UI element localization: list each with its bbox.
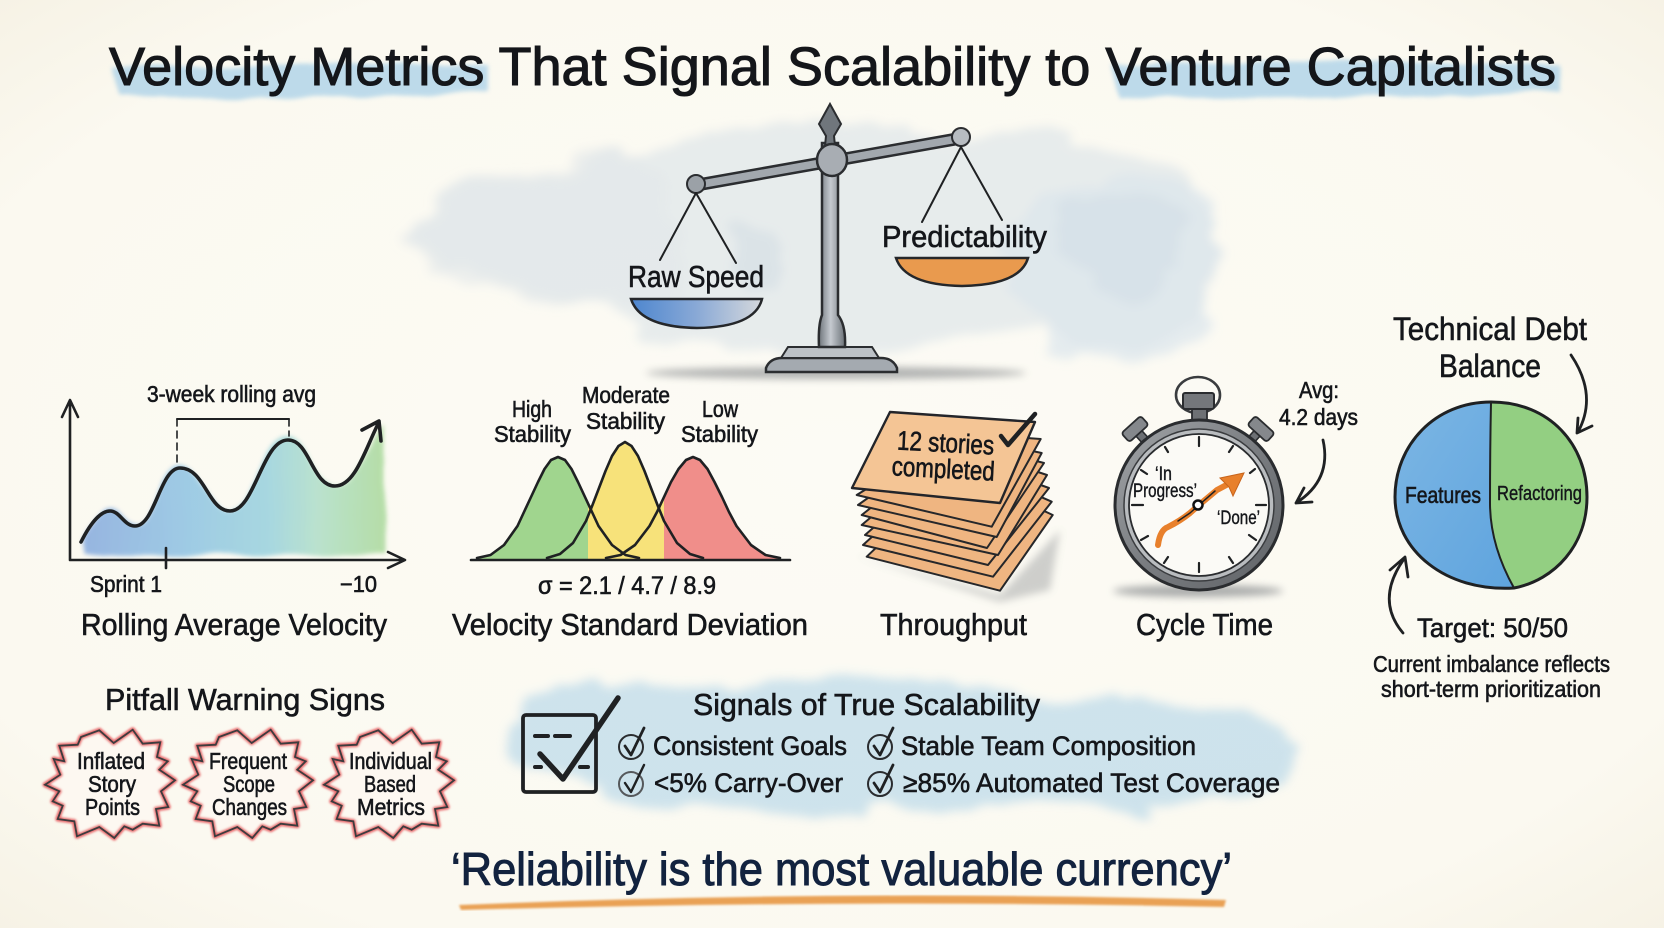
warning badge: inflated story points: Points (85, 794, 140, 820)
label: moderate stability: Moderate (582, 382, 670, 408)
scale finial (819, 104, 841, 146)
green bell fill (477, 457, 588, 560)
warning badge: individual based metrics: Individual (349, 748, 432, 774)
target label: Target: 50/50 (1417, 613, 1568, 643)
panel: signals of true scalability (504, 680, 1295, 815)
label: features: Features (1405, 482, 1481, 508)
red bell fill (664, 457, 780, 560)
imbalance note: Current imbalance reflects (1373, 651, 1610, 677)
yellow bell fill (588, 442, 664, 560)
warning badge: frequent scope changes (183, 730, 313, 838)
stopwatch crown (1176, 377, 1220, 413)
bracket: 3-week window (177, 418, 289, 420)
stopwatch side buttons (1121, 416, 1157, 451)
label: low stability: Low (702, 396, 738, 422)
dial label: in progress: Progress’ (1133, 481, 1197, 502)
heading: technical debt balance: Technical Debt (1393, 311, 1587, 347)
right pan (896, 258, 1028, 286)
panel: rolling average velocity (62, 381, 405, 642)
warning badge: individual based metrics: Metrics (357, 794, 425, 820)
average label: Avg: (1299, 377, 1339, 403)
arrow: heading to pie (1571, 355, 1592, 433)
label: sprint 10: −10 (340, 571, 377, 597)
arrow: average to stopwatch (1296, 440, 1325, 503)
bell outlines (477, 457, 639, 558)
card text (891, 425, 997, 487)
imbalance note: short-term prioritization (1381, 676, 1601, 702)
top card (852, 412, 1035, 503)
scale shadow (646, 367, 1026, 379)
label: sprint 1: Sprint 1 (90, 571, 162, 597)
label: predictability: Predictability (882, 219, 1047, 254)
card text: completed (891, 451, 996, 487)
scale strings (660, 147, 1002, 263)
scale background wash (400, 124, 1218, 360)
title highlight washes (112, 60, 1560, 98)
panel: cycle time (1113, 377, 1358, 642)
scale post (819, 143, 845, 347)
heading: pitfall warning signs: Pitfall Warning Signs (105, 682, 385, 717)
stopwatch hand (1158, 482, 1232, 545)
warning badge: frequent scope changes: Scope (223, 771, 275, 797)
stopwatch shadow (1113, 585, 1283, 597)
warning badge: frequent scope changes: Frequent (209, 748, 288, 774)
area fill (81, 425, 384, 555)
panel: velocity standard deviation (452, 382, 808, 642)
label: low stability: Stability (681, 421, 758, 447)
check: automated test coverage: ≥85% Automated Test Coverage (903, 768, 1280, 798)
warning badge: frequent scope changes: Changes (212, 794, 287, 820)
left pan (631, 299, 762, 328)
pie: refactoring slice (1490, 402, 1587, 588)
warning badge: inflated story points: Inflated (77, 748, 145, 774)
velocity line (81, 421, 381, 542)
label: raw speed: Raw Speed (628, 259, 764, 294)
label: high stability: Stability (494, 421, 571, 447)
arrow: target to pie (1389, 557, 1408, 633)
signals wash (504, 680, 1295, 815)
balance scale (628, 104, 1047, 379)
checklist icon (523, 698, 618, 792)
average label: 4.2 days (1279, 404, 1358, 430)
check: consistent goals: Consistent Goals (653, 731, 847, 761)
axes (62, 400, 405, 568)
stopwatch case (1115, 420, 1283, 590)
panel: technical debt balance (1373, 311, 1610, 702)
panel: pitfall warning signs (45, 682, 454, 838)
warning badge: individual based metrics: Based (364, 771, 416, 797)
heading: velocity standard deviation: Velocity Standard Deviation (452, 607, 808, 642)
dial label: in progress: ‘In (1155, 464, 1172, 485)
card text: 12 stories (896, 426, 995, 461)
check mark (1001, 414, 1035, 445)
warning badge: inflated story points (45, 730, 175, 838)
label: rolling avg: 3-week rolling avg (147, 381, 316, 407)
quote underline (459, 896, 1226, 910)
check: stable team composition: Stable Team Composition (901, 731, 1196, 761)
paper stack (857, 433, 1053, 591)
heading: signals: Signals of True Scalability (693, 687, 1040, 722)
stack shadow (855, 530, 1060, 602)
stopwatch ticks (1132, 437, 1266, 572)
pie outline (1395, 402, 1587, 588)
title: Velocity Metrics That Signal Scalability to Venture Capitalists (109, 37, 1556, 97)
warning badge: individual based metrics (324, 730, 454, 838)
heading: rolling average velocity: Rolling Average Velocity (81, 607, 387, 642)
dial label: done: ‘Done’ (1217, 508, 1260, 529)
heading: cycle time: Cycle Time (1136, 607, 1273, 642)
scale beam (696, 133, 963, 190)
quote: ‘Reliability is the most valuable currency’ (451, 843, 1232, 895)
label: refactoring: Refactoring (1497, 483, 1582, 505)
pie: features slice (1395, 402, 1514, 588)
heading: technical debt balance: Balance (1439, 348, 1541, 384)
baseline (471, 559, 790, 561)
label: high stability: High (512, 396, 552, 422)
label: moderate stability: Stability (586, 408, 665, 434)
warning badge: inflated story points: Story (88, 771, 136, 797)
sigma values: σ = 2.1 / 4.7 / 8.9 (538, 572, 716, 600)
panel: throughput (852, 412, 1060, 642)
scale base (766, 358, 897, 372)
heading: throughput: Throughput (880, 607, 1027, 642)
check: carry-over: <5% Carry-Over (654, 768, 843, 798)
